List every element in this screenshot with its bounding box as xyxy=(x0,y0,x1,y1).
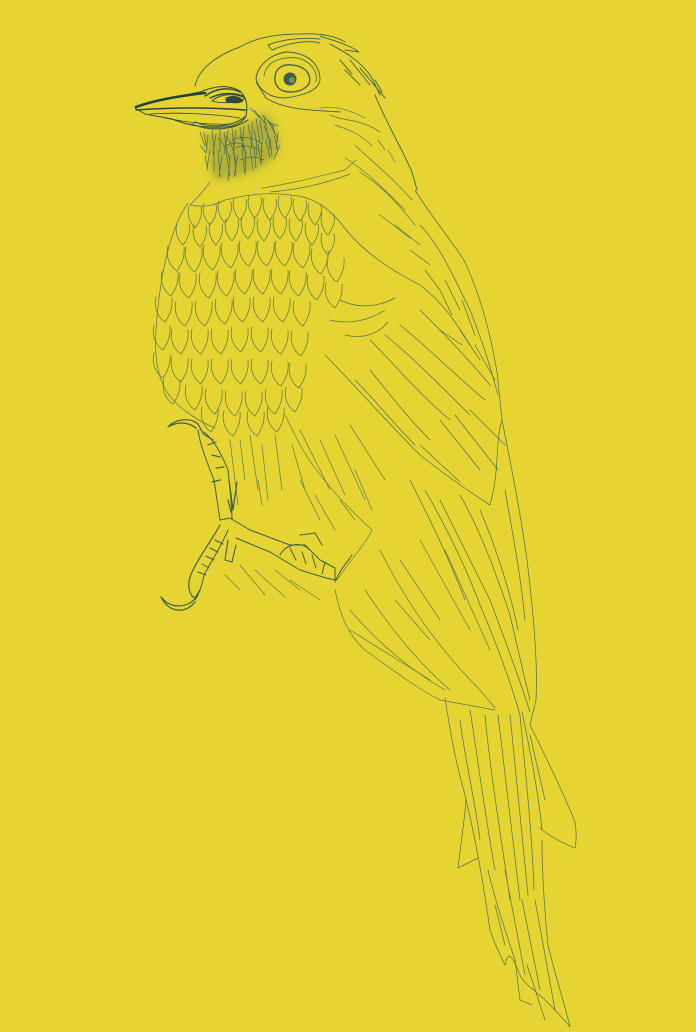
neck and cheek lines xyxy=(190,107,415,225)
belly and thigh fur xyxy=(225,415,495,710)
throat bib shading xyxy=(204,112,279,180)
head outline and crown xyxy=(195,34,417,190)
chest scallop feathers xyxy=(153,194,344,436)
eye xyxy=(256,52,340,112)
throat bib fur xyxy=(200,108,280,181)
beak xyxy=(135,87,248,129)
wing and back outline xyxy=(325,190,536,725)
tail feathers xyxy=(445,698,576,1027)
foot and claws xyxy=(161,420,352,610)
bird xyxy=(135,34,576,1027)
